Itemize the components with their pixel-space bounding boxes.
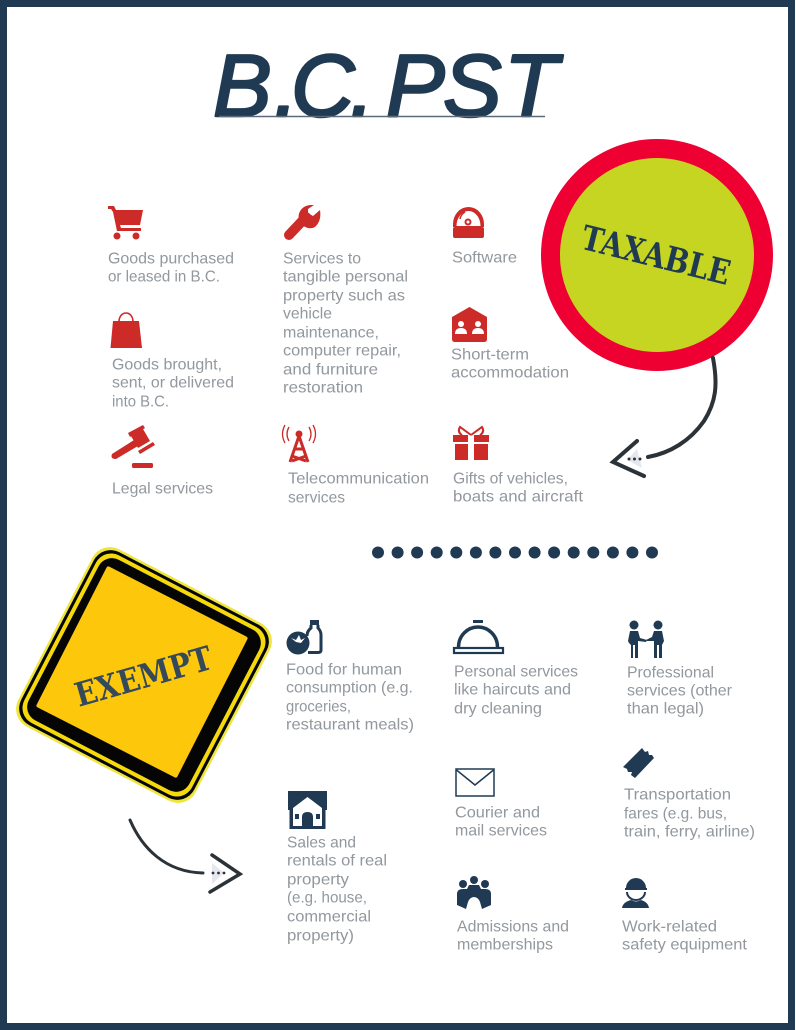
taxable item: gifts [453, 427, 584, 505]
text: gifts: boats and aircraft [453, 488, 584, 505]
exempt item: admissions and memberships [457, 876, 569, 953]
icon: gift box [453, 427, 489, 460]
icon: two people shaking hands [628, 620, 664, 658]
text: services to tangible property: property such as [283, 287, 405, 304]
exempt item: safety equipment [622, 878, 748, 953]
text: personal services: dry cleaning [454, 700, 542, 717]
text: personal services: like haircuts and [454, 681, 571, 698]
text: goods brought: Goods brought, [112, 356, 222, 373]
icon: software disc [453, 207, 484, 238]
exempt item: food [286, 620, 414, 733]
text: professional services: services (other [627, 682, 733, 699]
text: transportation: Transportation [624, 786, 731, 803]
text: goods purchased: Goods purchased [108, 250, 234, 267]
exempt item: transportation [623, 748, 755, 840]
icon: shopping bag [110, 313, 142, 348]
text: services to tangible property: restoration [283, 379, 363, 396]
text: courier and mail: Courier and [455, 804, 540, 821]
text: personal services: Personal services [454, 663, 578, 680]
text: short-term accommodation: accommodation [451, 364, 569, 381]
text: real property: rentals of real [287, 852, 387, 869]
text: transportation: train, ferry, airline) [624, 823, 755, 840]
taxable item: goods purchased [108, 206, 234, 285]
text: professional services: Professional [627, 664, 714, 681]
text: safety equipment: safety equipment [622, 936, 748, 953]
arrow: exempt to list [130, 820, 240, 892]
text: real property: property [287, 871, 349, 888]
taxable item: short-term accommodation [451, 307, 569, 381]
taxable item: services to tangible property [283, 205, 408, 396]
text: food: restaurant meals) [286, 716, 414, 733]
icon: worker with hard hat [622, 878, 649, 908]
text: food: Food for human [286, 661, 402, 678]
text: services to tangible property: vehicle [283, 305, 332, 322]
icon: ticket [623, 748, 654, 778]
text: goods brought: sent, or delivered [112, 374, 234, 391]
text: real property: Sales and [287, 834, 356, 851]
text: transportation: fares (e.g. bus, [624, 805, 727, 822]
icon: house [288, 791, 327, 829]
text: real property: (e.g. house, [287, 889, 367, 906]
dotted separator [372, 546, 658, 558]
text: professional services: than legal) [627, 700, 704, 717]
icon: gavel [112, 425, 155, 468]
text: legal services: Legal services [112, 480, 213, 497]
text: services to tangible property: and furniture [283, 361, 378, 378]
icon: radio tower [282, 425, 316, 462]
exempt item: real property [287, 791, 387, 944]
taxable item: telecommunication [282, 425, 429, 506]
text: admissions and memberships: memberships [457, 936, 553, 953]
icon: house with people [452, 307, 487, 342]
text: software: Software [452, 249, 517, 266]
taxable item: goods brought [110, 313, 234, 410]
text: admissions and memberships: Admissions and [457, 918, 569, 935]
text: real property: commercial [287, 908, 371, 925]
title: B.C. PST [0, 36, 563, 135]
text: real property: property) [287, 927, 354, 944]
text: services to tangible property: Services to [283, 250, 361, 267]
text: goods brought: into B.C. [112, 393, 169, 410]
icon: group of people [457, 876, 491, 909]
taxable badge: TAXABLE [577, 218, 734, 294]
text: telecommunication: services [288, 489, 345, 506]
arrow: taxable to list [613, 358, 716, 476]
text: services to tangible property: computer repair, [283, 342, 401, 359]
taxable badge [541, 139, 773, 371]
taxable item: legal services [112, 425, 213, 497]
icon: shopping cart [108, 206, 143, 240]
exempt sign [9, 540, 279, 810]
exempt item: professional services [627, 620, 733, 717]
text: goods purchased: or leased in B.C. [108, 268, 220, 285]
text: food: consumption (e.g. [286, 679, 413, 696]
exempt item: personal services [454, 620, 578, 717]
taxable item: software [452, 207, 517, 266]
text: safety equipment: Work-related [622, 918, 717, 935]
icon: wrench [289, 205, 320, 235]
exempt sign: EXEMPT [70, 638, 217, 715]
text: gifts: Gifts of vehicles, [453, 470, 568, 487]
icon: cloche [454, 620, 503, 653]
text: short-term accommodation: Short-term [451, 346, 529, 363]
text: food: groceries, [286, 698, 351, 715]
icon: tomato and bottle [286, 620, 321, 654]
icon: envelope [456, 769, 494, 796]
text: services to tangible property: tangible personal [283, 268, 408, 285]
text: telecommunication: Telecommunication [288, 470, 429, 487]
text: services to tangible property: maintenance, [283, 324, 379, 341]
exempt item: courier and mail [455, 769, 547, 839]
text: courier and mail: mail services [455, 822, 547, 839]
